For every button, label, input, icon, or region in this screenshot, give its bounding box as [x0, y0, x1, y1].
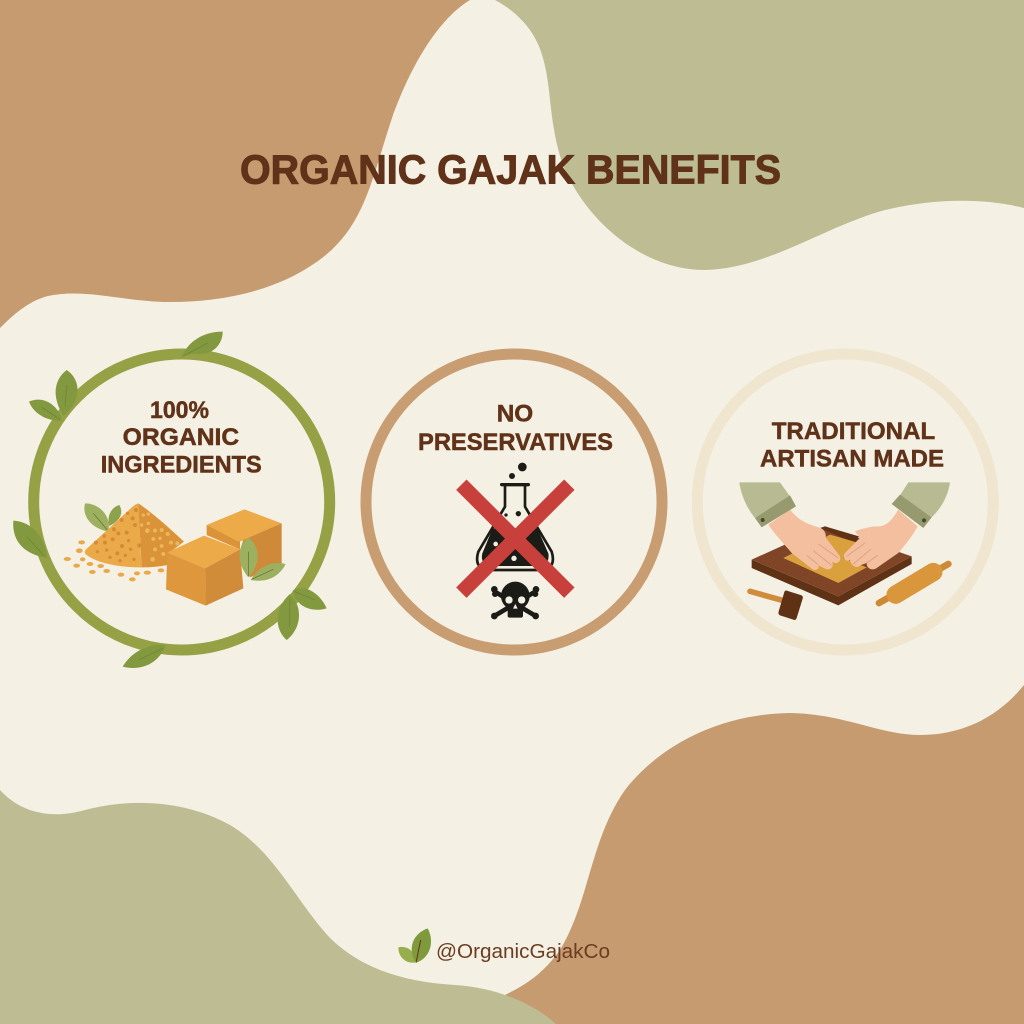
label: traditional artisan made	[760, 418, 944, 473]
label: 100% organic ingredients: INGREDIENTS	[101, 452, 262, 479]
background blob: top left tan	[0, 0, 470, 328]
footer handle	[398, 928, 610, 963]
title: ORGANIC GAJAK BENEFITS	[240, 146, 781, 192]
icon: sesame pile and jaggery cubes	[64, 503, 286, 606]
background blob: bottom left green	[0, 790, 556, 1024]
label: traditional artisan made: ARTISAN MADE	[760, 446, 944, 473]
handle text: @OrganicGajakCo	[436, 941, 610, 963]
panel: traditional artisan made	[697, 354, 993, 650]
label: no preservatives: NO	[497, 401, 533, 428]
ring	[697, 354, 993, 650]
label: traditional artisan made: TRADITIONAL	[772, 418, 935, 445]
background blob: bottom right tan	[505, 685, 1024, 1024]
label: 100% organic ingredients	[101, 397, 262, 479]
ring with vine leaves	[13, 332, 330, 668]
icon: leaf logo	[398, 928, 431, 963]
background blob: top right green	[495, 0, 1024, 270]
panel: organic ingredients	[13, 332, 330, 668]
icon: hands pressing gajak on a board	[739, 482, 950, 620]
ring	[366, 354, 662, 650]
icon: flask crossed out with skull	[461, 463, 569, 619]
label: 100% organic ingredients: 100%	[150, 397, 209, 424]
label: no preservatives: PRESERVATIVES	[418, 429, 613, 456]
panel: no preservatives	[366, 354, 662, 650]
label: no preservatives	[418, 401, 613, 456]
label: 100% organic ingredients: ORGANIC	[123, 424, 239, 451]
